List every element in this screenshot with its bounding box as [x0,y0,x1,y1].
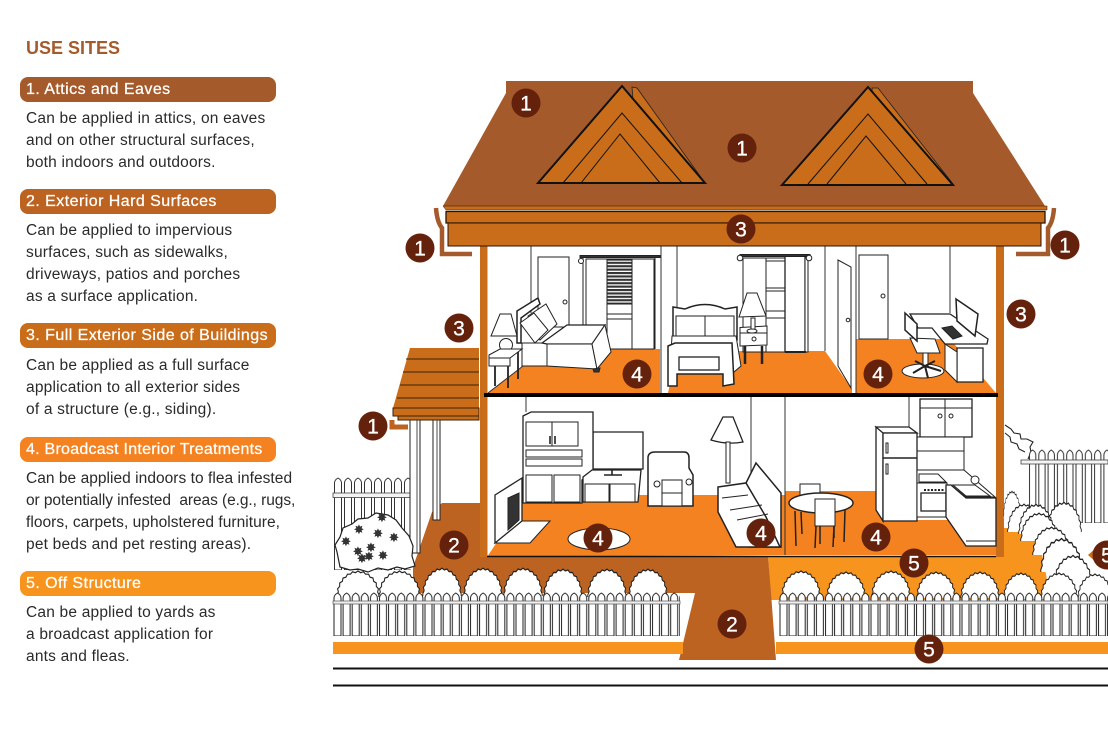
bushes along front fence, left [337,568,667,597]
flowering bush at left: ✸ [341,535,352,550]
text: exterior hard surfaces description: Can be applied to impervious [26,222,232,239]
text: broadcast interior description: floors, carpets, upholstered furniture, [26,514,280,531]
walkway: brown hard surface [413,503,776,660]
flowering bush at left: ✸ [353,545,364,560]
text: attics description [26,110,265,171]
gutter bracket right [1016,208,1054,254]
living room furniture [495,412,781,550]
heading: 3. Full Exterior Side of Buildings: 3. Full Exterior Side of Buildings [26,327,268,344]
yard: off structure orange [768,528,1050,600]
heading: 5. Off Structure: 5. Off Structure [26,575,141,592]
lower floor carpet [487,491,996,557]
badge 4 bedroom: 4 [631,364,643,386]
walls of the structure [480,246,1004,557]
number badges [358,88,1108,664]
badge 1 eave left: 1 [414,238,426,260]
heading: 1. Attics and Eaves: 1. Attics and Eaves [26,81,171,98]
badge 1 roof left [512,88,540,118]
door between rooms [838,260,851,388]
heading: 4. Broadcast Interior Treatments: 4. Broadcast Interior Treatments [26,441,263,458]
text: broadcast interior description: Can be applied indoors to flea infested [26,470,292,487]
flowering bush at left: ✸ [357,552,368,567]
flowering bush at left: ✸ [354,523,365,538]
text: off structure description [26,604,216,665]
street: orange strips and road lines [333,642,1108,686]
bush cluster at right side [1003,491,1092,587]
bedroom left [489,256,660,388]
flowering bush at left: ✸ [373,527,384,542]
heading: 1. Attics and Eaves [20,77,276,102]
gutter bracket left [436,208,472,254]
front fence left [333,592,680,636]
badge 4 kitchen [862,522,890,552]
heading: 3. Full Exterior Side of Buildings [20,323,276,348]
office room [859,255,988,382]
badge 5 strip [914,634,944,664]
title: USE SITES [26,38,120,58]
text: off structure description: Can be applied to yards as [26,604,216,621]
badge 4 sofa: 4 [755,522,767,546]
text: exterior hard surfaces description [26,222,240,305]
badge 3 right wall: 3 [1015,304,1027,326]
badge 2 front walkway [718,610,746,638]
text: full exterior description: Can be applied as a full surface [26,357,250,374]
flowering bush at left: ✸ [377,511,388,526]
badge 1 porch: 1 [367,416,379,438]
badge 4 office [864,360,892,388]
eaves and fascia [443,206,1047,246]
badge 1 eave left [406,234,434,262]
flowering bush at left: ✸ [389,531,400,546]
flowering bush at left: ✸ [378,549,389,564]
badge 3 fascia [726,214,756,244]
badge 3 left wall [444,314,474,342]
text: attics description: Can be applied in attics, on eaves [26,110,265,127]
room lines [488,246,950,555]
heading: 5. Off Structure [20,571,276,596]
heading: 2. Exterior Hard Surfaces: 2. Exterior Hard Surfaces [26,193,217,210]
text: full exterior description: of a structure (e.g., siding). [26,401,216,418]
bedroom middle [668,254,812,386]
badge 1 eave right [1050,230,1080,260]
badge 1 porch [358,412,388,440]
dormer right [782,87,953,185]
badge 3 fascia: 3 [735,218,747,242]
text: broadcast interior description [26,470,295,553]
front fence right [779,592,1108,636]
badge 5 clipped at right edge [1088,540,1108,570]
text: exterior hard surfaces description: as a surface application. [26,288,198,305]
badge 2 porch walkway [440,530,468,560]
badge 1 roof centre [728,134,756,162]
text: attics description: both indoors and outdoors. [26,154,216,171]
text: exterior hard surfaces description: driveways, patios and porches [26,266,240,283]
text: full exterior description: application to all exterior sides [26,379,240,396]
kitchen [789,399,996,548]
badge 4 kitchen: 4 [870,526,882,550]
badge 4 rug: 4 [592,528,604,550]
porch [392,348,479,553]
side fence right [1005,425,1108,523]
house interior background [487,246,997,557]
badge 5 strip: 5 [923,638,935,662]
badge 4 bedroom [622,360,652,388]
text: full exterior description [26,357,250,418]
badge 3 left wall: 3 [453,318,465,340]
badge 5 yard [900,548,928,578]
badge 5 yard: 5 [908,552,920,576]
badge 1 roof centre: 1 [736,138,748,160]
badge 2 porch walkway: 2 [448,534,460,558]
text: broadcast interior description: or potentially infested areas (e.g., rugs, [26,492,295,509]
text: off structure description: ants and fleas. [26,648,130,665]
badge 1 eave right: 1 [1059,234,1071,258]
side fence left [333,477,414,570]
roof [443,81,1045,206]
badge 4 office: 4 [872,364,884,386]
bushes along front fence, right [782,571,1108,600]
flowering bush at left [335,511,415,572]
text: exterior hard surfaces description: surfaces, such as sidewalks, [26,244,228,261]
badge 4 sofa [746,518,776,548]
dormer left [538,86,705,183]
badge 2 front walkway: 2 [726,614,738,636]
flowering bush at left: ✸ [366,541,377,556]
badge 4 rug [584,524,612,552]
badge 3 right wall [1006,300,1036,328]
upper floor carpet [488,339,996,393]
text: attics description: and on other structural surfaces, [26,132,255,149]
text: off structure description: a broadcast application for [26,626,213,643]
floor between storeys [484,393,998,397]
text: broadcast interior description: pet beds and pet resting areas). [26,536,251,553]
heading: 2. Exterior Hard Surfaces [20,189,276,214]
heading: 4. Broadcast Interior Treatments [20,437,276,462]
badge 1 roof left: 1 [520,92,532,116]
flowering bush at left: ✸ [364,550,375,565]
